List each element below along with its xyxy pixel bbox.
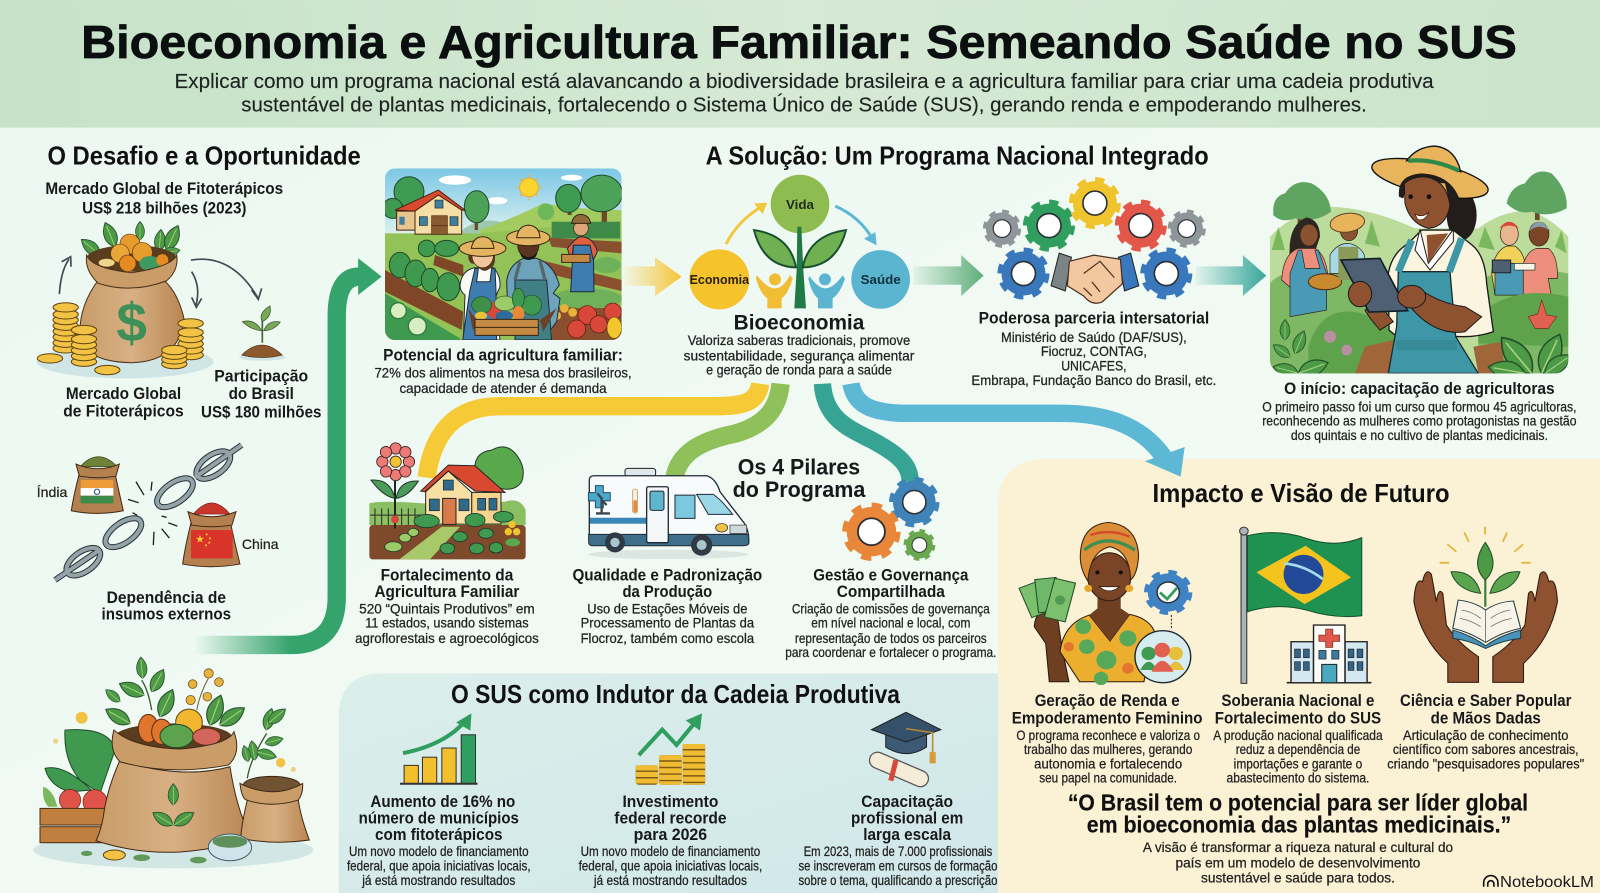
text: investimento federal: federal recorde [614,809,727,828]
text: qualidade padronização [572,566,762,646]
text: mercado global label [63,384,184,420]
text: mercado global 218 bilhões [45,179,283,217]
text: fortalecimento agricultura: Agricultura Familiar [374,582,520,601]
text: potencial da agricultura: 72% dos alimentos na mesa dos brasileiros, [374,366,632,381]
text: aumento municípios: Aumento de 16% no [370,792,515,811]
text: geração de renda: autonomia e fortalecendo [1034,756,1182,771]
text: geração de renda: Empoderamento Feminino [1012,709,1203,728]
text: fortalecimento agricultura: agroflorestais e agroecológicos [355,631,539,646]
icon: money bag with coins [37,220,213,378]
icon: bar chart with arrow [400,713,478,784]
text: parceria intersetorial: Poderosa parceria intersatorial [979,309,1209,328]
text: investimento federal: Investimento [622,792,718,811]
text: parceria intersetorial: Fiocruz, CONTAG, [1041,344,1147,359]
text: capacitação: larga escala [863,825,952,844]
text: qualidade padronização: da Produção [622,582,712,601]
icon: gears and handshake [986,181,1203,303]
icon: sprout [239,306,286,361]
text: potencial da agricultura [374,345,632,396]
diagram: bioeconomia circles: Economia [690,272,750,287]
text: início capacitação: O início: capacitação de agricultoras [1284,379,1555,398]
text: fortalecimento agricultura: 520 “Quintais Produtivos” em [359,601,535,616]
subtitle: Explicar como um programa nacional está alavancando a biodiversidade brasileira e a agricultura familiar para criar uma cadeia produtiva [174,71,1434,93]
text: gestão governança: em nível nacional e local, com [811,616,970,631]
arrow: light green flow to pillar 2 [674,384,781,478]
icon: hands holding book and plant [1414,527,1557,682]
text: início capacitação [1262,379,1577,443]
text: ciência e saber: criando "pesquisadores populares" [1387,756,1584,771]
heading: solução: A Solução: Um Programa Nacional Integrado [706,142,1209,170]
text: gestão governança: representação de todos os parceiros [795,631,987,646]
illustration: woman farmer with tablet [1270,140,1575,382]
text: aumento municípios [347,792,531,888]
subtitle [174,71,1434,116]
text: geração de renda: seu papel na comunidade. [1039,771,1177,786]
icon: money bag with coins: $ [116,292,147,354]
text: aumento municípios: com fitoterápicos [375,825,503,844]
text: ciência e saber [1387,691,1584,771]
text: investimento federal: já está mostrando resultados [593,873,747,888]
text: soberania nacional: reduz a dependência de [1236,742,1360,757]
arrow: green to partnership [913,255,984,296]
text: bioeconomia: Bioeconomia [734,311,865,335]
text: gestão governança: Gestão e Governança [813,566,969,585]
diagram: bioeconomia circles: Vida [786,197,815,212]
text: gestão governança [785,566,996,660]
diagram: bioeconomia circles [689,175,910,309]
text: gestão governança: para coordenar e fortalecer o programa. [785,645,996,660]
text: qualidade padronização: Uso de Estações Móveis de [587,601,748,616]
arrow: yellow to bioeconomia [624,257,682,296]
icon: woman with money [1019,522,1191,685]
text: bioeconomia: Valoriza saberas tradicionais, promove [688,333,911,348]
text: aumento municípios: Um novo modelo de financiamento [349,844,529,859]
text: investimento federal: Um novo modelo de financiamento [581,844,760,859]
text: aumento municípios: federal, que apoia iniciativas locais, [347,858,531,873]
text: visão: sustentável e saúde para todos. [1201,871,1395,886]
icon: house and garden [369,443,526,559]
text: participação do Brasil: US$ 180 milhões [201,402,321,421]
icon: mobile processing van [588,468,749,559]
text: parceria intersetorial: UNICAFES, [1061,358,1127,373]
text: capacitação: sobre o tema, qualificando a prescrição [798,873,998,888]
text: soberania nacional [1213,691,1383,786]
text: capacitação [798,792,998,888]
text: visão [1143,840,1453,886]
icon: governance gears [846,480,936,559]
quote: “O Brasil tem o potencial para ser líder global [1068,789,1528,815]
text: gestão governança: Criação de comissões de governança [792,601,990,616]
text: investimento federal: federal, que apoia iniciativas locais, [579,858,762,873]
icon: China sack: ★ [195,534,205,546]
quote: em bioeconomia das plantas medicinais.” [1087,812,1511,838]
text: participação do Brasil [201,367,321,421]
text: soberania nacional: Soberania Nacional e [1221,691,1374,710]
heading: desafio: O Desafio e a Oportunidade [47,142,361,170]
text: geração de renda: Geração de Renda e [1035,691,1180,710]
arrow: teal to training [1196,255,1266,296]
icon: coins with arrow [636,713,705,785]
section: desafio e oportunidade [33,142,361,868]
text: parceria intersetorial: Embrapa, Fundação Banco do Brasil, etc. [971,373,1216,388]
text: investimento federal: para 2026 [634,825,707,844]
text: capacitação: Capacitação [861,792,953,811]
quote [1068,789,1528,838]
icon: harvest sack with vegetables [33,657,313,868]
text: participação do Brasil: do Brasil [229,384,294,403]
icon: Brazil flag and hospital [1240,527,1371,683]
text: ciência e saber: de Mãos Dadas [1431,709,1541,728]
text: mercado global label: de Fitoterápicos [63,401,184,420]
text: qualidade padronização: Processamento de Plantas da [581,616,754,631]
text: dependência: insumos externos [102,604,231,623]
text: fortalecimento agricultura [355,566,539,646]
panel: impacto e visão de futuro [998,459,1600,893]
text: participação do Brasil: Participação [214,367,308,386]
heading: 4 pilares: do Programa [733,477,866,502]
text: mercado global 218 bilhões: US$ 218 bilhões (2023) [82,198,246,217]
icon: broken chain [55,445,242,581]
label: Índia: Índia [37,484,68,500]
text: dependência: Dependência de [107,588,226,607]
heading: 4 pilares: Os 4 Pilares [738,455,860,480]
text: potencial da agricultura: capacidade de atender é demanda [399,381,607,396]
panel: SUS como indutor [339,674,998,893]
text: soberania nacional: A produção nacional qualificada [1213,728,1383,743]
arrow: teal flow to pillar 3 [822,384,910,482]
text: bioeconomia: e geração de ronda para a saúde [706,363,892,378]
text: qualidade padronização: Flocroz, também como escola [581,631,754,646]
text: capacitação: Em 2023, mais de 7.000 profissionais [804,844,992,859]
text: capacitação: profissional em [851,809,963,828]
text: fortalecimento agricultura: Fortalecimento da [381,566,514,585]
text: ciência e saber: Articulação de conhecimento [1403,728,1569,743]
heading: SUS: O SUS como Indutor da Cadeia Produtiva [451,681,901,709]
text: ciência e saber: científico com sabores ancestrais, [1393,742,1579,757]
icon: graduation cap and diploma [871,712,941,781]
title: Bioeconomia e Agricultura Familiar: Semeando Saúde no SUS [81,16,1517,68]
text: aumento municípios: número de municípios [359,809,519,828]
subtitle: sustentável de plantas medicinais, fortalecendo o Sistema Único de Saúde (SUS), gerando renda e empoderando mulheres. [241,93,1367,116]
text: capacitação: se inscreveram em cursos de formação [798,858,998,873]
text: gestão governança: Compartilhada [837,582,945,601]
text: fortalecimento agricultura: 11 estados, usando sistemas [365,616,529,631]
text: bioeconomia [684,311,915,378]
text: parceria intersetorial [971,309,1216,388]
arrow: big green flow to farm [194,258,382,645]
diagram: bioeconomia circles: Saúde [861,272,901,287]
icon: China sack [183,503,240,567]
text: visão: país em um modelo de desenvolvimento [1176,855,1421,870]
label: China: China [242,537,279,552]
text: qualidade padronização: Qualidade e Padronização [572,566,762,585]
text: parceria intersetorial: Ministério de Saúdo (DAF/SUS), [1001,330,1187,345]
illustration: family farm scene [383,168,623,340]
arrows: bag flows [59,257,262,307]
text: geração de renda: O programa reconhece e valoriza o [1016,728,1200,743]
heading: 4 pilares [733,455,866,502]
text: dependência [102,588,231,623]
text: potencial da agricultura: Potencial da agricultura familiar: [383,345,623,364]
arrow: yellow flow to pillar 1 [427,384,760,478]
text: geração de renda: trabalho das mulheres, gerando [1024,742,1193,757]
text: início capacitação: dos quintais e no cultivo de plantas medicinais. [1291,428,1548,443]
logo: NotebookLM: NotebookLM [1500,874,1594,891]
arrow: blue flow to impact [851,384,1185,477]
text: soberania nacional: abastecimento do sistema. [1227,771,1369,786]
heading: impacto: Impacto e Visão de Futuro [1153,480,1449,508]
text: geração de renda [1012,691,1203,786]
text: visão: A visão é transformar a riqueza natural e cultural do [1143,840,1453,855]
header band [0,0,1600,128]
text: investimento federal [579,792,762,888]
icon: India sack [71,457,123,513]
text: ciência e saber: Ciência e Saber Popular [1400,691,1572,710]
text: mercado global 218 bilhões: Mercado Global de Fitoterápicos [45,179,283,198]
text: soberania nacional: Fortalecimento do SUS [1215,709,1381,728]
text: bioeconomia: sustentabilidade, segurança alimentar [684,348,915,363]
text: mercado global label: Mercado Global [66,384,181,403]
text: aumento municípios: já está mostrando resultados [361,873,515,888]
text: soberania nacional: importações e garante o [1234,756,1363,771]
